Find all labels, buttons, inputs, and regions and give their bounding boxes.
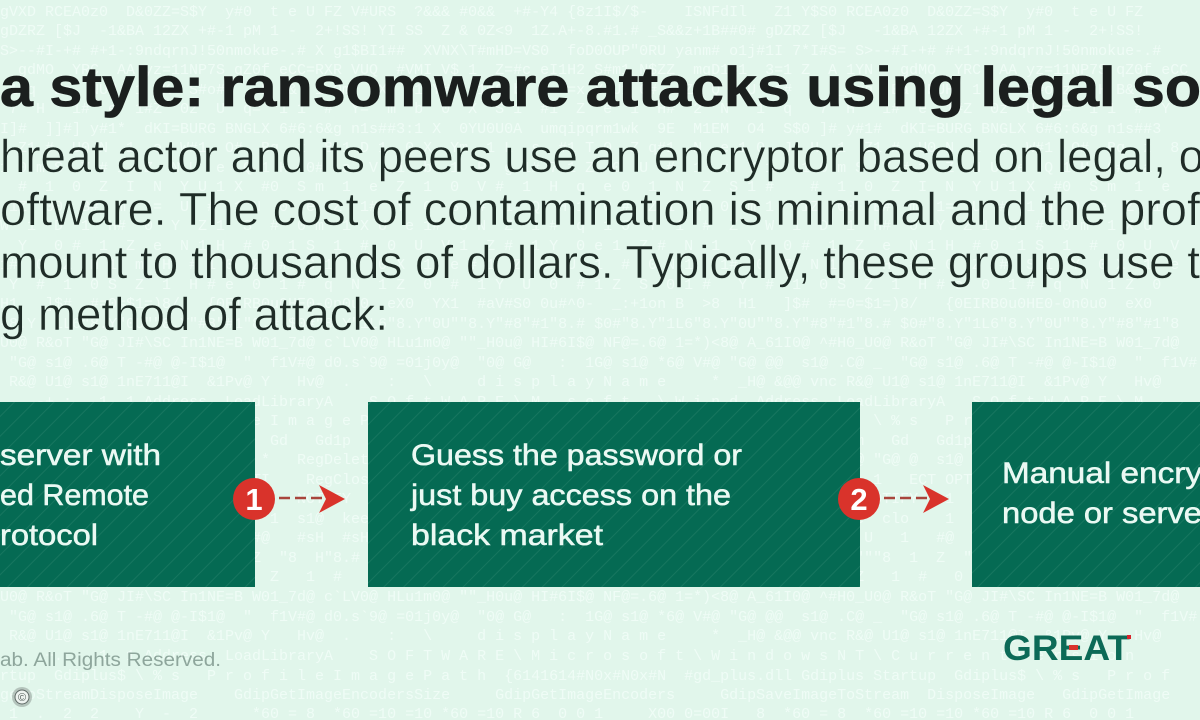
panel: step two: just buy access on the [410, 479, 731, 512]
arrow one [233, 478, 345, 520]
background code texture: gdMO YRC AA yz=11NP7S qZ0f eCC=RXR VUQ #VMI V$ 1 Z=#c eI1H2 S#m1 N$ZZ mqD1=1 3=1 Z A 1YN gdMO YRC AA yz=11NP7S qZ0f eCC [0, 62, 1188, 79]
panel: step three: Manual encry [1002, 457, 1200, 490]
background code texture: -+.: 1 1 Address LoadLibraryA S O f t W A R E \ M s o f t \ W i n d Address LoadLibraryA S O f t W A R E \ M [0, 394, 1143, 411]
background code texture: -+.: 1 1 Address LoadLibraryA S O F T W A R E \ M i c r o s o f t \ W i n d o w s N T \ C u r r e n t V e r s i o n [0, 648, 1134, 665]
background code texture: rtup Gdiplus$ \ % s P r o f i l e I m a g e P a t h {6141614#N0x#N0x#N #gd_plus.dll Gdiplus Startup Gdiplus$ \ % s P r o f [0, 668, 1170, 685]
background code texture: 1Z 00 B# m 1= U # 1 N 0 e Z 1# Y 0 S # 1 Q H 1 0 # Z 1 N 0 m 1 1Z 00 B# m 1= U # 1 N 0 e Z 1# [0, 199, 1170, 216]
arrow two [838, 478, 949, 520]
background code texture: "G@ s1@ .6@ T -#@ @-I$1@ " f1V#@ d0.s`9@ =01j0y@ "0@ G@ : 1G@ s1@ *6@ V#@ "G@ @@ s1@ .C@ _ "G@ s1@ .6@ T -#@ @-I$1@ " f1V# [0, 609, 1197, 626]
intro paragraph [0, 130, 1200, 340]
panel: step three: node or serve [1002, 497, 1200, 530]
background code texture: S>--#I-+# #+1-:9ndqrnJ!50nmokue-.# X g1$BI1## XVNX\T#mHD=VS0 foD0OUP"0RU yanm# o1j#1I 7*I#S= S>--#I-+# #+1-:9ndqrnJ!50nmokue-.# [0, 43, 1161, 60]
panel: step one: ed Remote [0, 479, 149, 512]
background code texture: 1 s @ 1 0 U 1 #@ #sH #sH us@ #sH us@ #sH us@ 1 s @ 1 0 U 1 #@ #sH #sH us@ [0, 530, 1116, 547]
background code texture: gDZRZ [$J -1&BA 12ZX +#-1 pM 1 - 2+!SS! YI SS Z & 0Z<9 1Z.A+-8.#1.# _S&&z+1B##0# gDZRZ [$J -1&BA 12ZX +#-1 pM 1 - 2+!SS! [0, 23, 1143, 40]
background code texture: R&@ U1@ s1@ 1nE711@I &1Pv@ Y Hv@ . : \ d i s p l a y N a m e * _H@ &@@ vnc R&@ U1@ s1@ 1nE711@I &1Pv@ Y Hv@ [0, 628, 1161, 645]
panel: step one: rotocol [0, 519, 98, 552]
panel: step one: server with [0, 439, 161, 472]
background code texture: # H 1 0 1 S Y 0 Z 1 # 0 1 N Z 1 # 0 # H 1 0 1 S Y 0 Z 1 # 0 1 N Z 1 # 0 [0, 569, 1143, 586]
background code texture: G d i \ % s P r o f i l e I m a g e P a t h s.dll Gdip s o f t s.dll Gdip G d i \ % s P r o f i l e I m a g e [0, 413, 1152, 430]
intro paragraph: g method of attack: [0, 288, 388, 340]
background code texture: s1@ *6@ 1 V#@ "G@ @ s1@ * RegDeleteKeyE 1@ V#@ &1 S RegDeleteKeyE s1@ *6@ 1 V#@ "G@ @ s1@ * RegDeleteKeyE [0, 452, 1125, 469]
background code texture: 1 0 m S Y # 1 Z N U e Q 1 H 0# a V 1 b 1 R g 1# 7 1 Z 0 U # 1 x Y 1 1 0 m S Y # 1 Z N U e Q 1 H 0# a [0, 160, 1152, 177]
background code texture: "G@ s1@ .6@ T -#@ @-I$1@ " f1V#@ d0.s`9@ =01j0y@ "0@ G@ : 1G@ s1@ *6@ V#@ "G@ @@ s1@ .C@ _ "G@ s1@ .6@ T -#@ @-I$1@ " f1V# [0, 355, 1197, 372]
background code texture: Y 0 # 1 Z e N 1 H # 0 1 S 1 # 0 U V 1 Z # 1 Y 0 e 1 Z # N 1 Y 0 # 1 Z e N 1 H # 0 1 S 1 # 0 U V [0, 238, 1179, 255]
background code texture: Z1 # U0 N 1 e W#1 O# Bq z 8 1 D 1 0 X Ym 1 L s #1 T 0 Z q#1 N e 1 0 J H 1 Z1 # U0 N 1 e W#1 O# Bq z 8 [0, 140, 1179, 157]
background code texture: gVXD RCEA0z0 D&0ZZ=S$Y y#0 t e U FZ V#URS ?&&& #0&& +#-Y4 {8z1I$/$- ISNFdIl Z1 Y$S0 RCEA0z0 D&0ZZ=S$Y y#0 t e U FZ [0, 4, 1143, 21]
background code texture: -.: #0 1 E 1 ECT OPTI RegClose Key 1 #@ s1@ RegClose Key -.: #0 1 E 1 ECT OPTI RegClose Key [0, 472, 1143, 489]
background code texture: 1# 0 Z N 1 m H # 1 0 Z # S 1 Y 0 X 1 e # 1 Z 0 U 1 # 0 N 1 1# 0 Z N 1 m H # 1 0 Z # S 1 Y 0 X 1 e [0, 257, 1179, 274]
background code texture: W 1 D 1 H# 0 Y Z 1 S # 0 m 1 X U e 1# 0 N Z 1 # q 1 0 Y 1 # Z W 1 D 1 H# 0 Y Z 1 S # 0 m 1 X U [0, 218, 1152, 235]
intro paragraph: oftware. The cost of contamination is minimal and the prof [0, 183, 1200, 235]
arrow two: 2 [850, 482, 868, 517]
logo: GREAT [1003, 629, 1130, 668]
icon: copyright badge: © [18, 692, 26, 704]
panel: step one [0, 402, 255, 587]
panel: step two: Guess the password or [411, 439, 742, 472]
copyright line: ab. All Rights Reserved. [0, 650, 221, 671]
arrow one: 1 [245, 482, 263, 517]
icon: copyright badge [12, 687, 32, 707]
background code texture: Nv A H 1 S NOTIFY 1 NOTIFY PROPFIND 1 PROPFIND Nv A H 1 S NOTIFY 1 NOTIFY PROPFIND [0, 491, 1152, 508]
background code texture: # 1 0 Z I N Y U 1 X #0 S m 1 e Z 1 0 V # 1 H q e 0 1 N Z S 1 # # 1 0 Z I N Y U 1 X #0 S m 1 e [0, 179, 1170, 196]
background code texture: R&@ U1@ s1@ 1nE711@I &1Pv@ Y Hv@ . : \ d i s p l a y N a m e * _H@ &@@ vnc R&@ U1@ s1@ 1nE711@I &1Pv@ Y Hv@ [0, 374, 1161, 391]
title: a style: ransomware attacks using legal so [0, 55, 1200, 118]
panel: step two [368, 402, 860, 587]
background code texture: 0@@ 1 Gd1 Gd1pGet1m Gd Gd1p oders Gd1p s1 oders 0@@ 1 Gd1 Gd1pGet1m Gd Gd1p oders Gd1p s1 [0, 433, 1152, 450]
panel: step two: black market [411, 519, 604, 552]
background code texture: Y # 1 0 S Z 1 H # e 0 1 # q N 1 Z 0 # 1 Y U 0 # 1 Z S 0 1 # Y # 1 0 S Z 1 H # e 0 1 # q N 1 Z 0 [0, 277, 1161, 294]
background code texture: geToStreamDisposeImage GdipGetImageEncodersSize GdipGetImageEncoders GdipSaveImageToStream DisposeImage GdipGetImage [0, 687, 1170, 704]
intro paragraph: mount to thousands of dollars. Typically, these groups use t [0, 236, 1200, 288]
background code texture: 7 H 1# e 1#Z 0z U q= 1 1 # Y= m b 0 X S 1 #1 Z e 1 H# 2 N 1 q 7 H 1# e 1#Z 0z U q= 1 1 # Y [0, 101, 1170, 118]
background code texture: U0@ R&oT "G@ JI#\SC In1NE=B W01_7d@ c`LV0@ HLu1m0@ ""_H0u@ HI#6I$@ NF@=.6@ 1=*)<8@ A_61I0@ ^#H0_U0@ R&oT "G@ JI#\SC In1NE=B W01_7d@ [0, 589, 1179, 606]
background code texture: H1 ]$# #=0=$1=)8/ {0EIRB0u0HE0-0n0u0 eX0 YX1 #aV#S0 0u#^0- _:+1on B >8 H1 ]$# #=0=$1=)8/ {0EIRB0u0HE0-0n0u0 eX0 [0, 296, 1152, 313]
intro paragraph: hreat actor and its peers use an encryptor based on legal, o [0, 130, 1200, 182]
background code texture: I]# ]]#] y#1* dKI=BURG BNGLX 6#6:6&g n1s##3:1 X 0YU0U0A umqipqrm1wk 9E M1EM O4 S$0 ]# y#1# dKI=BURG BNGLX 6#6:6&g n1s##3 [0, 121, 1161, 138]
background code texture: U0@ R&oT "G@ JI#\SC In1NE=B W01_7d@ c`LV0@ HLu1m0@ ""_H0u@ HI#6I$@ NF@=.6@ 1=*)<8@ A_61I0@ ^#H0_U0@ R&oT "G@ JI#\SC In1NE=B W01_7d@ [0, 335, 1179, 352]
background code texture: _1=q Ea NUH 1 K S#o#z H B& 1 0m VX D1 Y# 1#0 b # =x Y U1 0# eZ Q gU 1# 7 _1=q Ea NUH 1 K S#o#z H B& 1 [0, 82, 1161, 99]
background code texture: ^8.Y 1L6"8.Y"0U""8.Y"#8"#1"8.# $0#"8.Y"1L6"8.Y"0U""8.Y"#8"#1"8.# $0#"8.Y"1L6"8.Y"0U""8.Y"#8"#1"8.# $0#"8.Y"1L6"8.Y"0U""8.Y"#8"#1"8 [0, 316, 1179, 333]
background code texture: 1 G 1 0 ive clo 1 s1@ keep alive proxy proxy 1 G 1 0 ive clo 1 s1@ keep alive [0, 511, 1125, 528]
panel: step three [972, 402, 1200, 587]
background code texture: " 1 Z "'7Z"""8 1 Z "8 H"8.# S$@ "8.H" 8.# S$@ 8.# S$@ " 1 Z "'7Z"""8 1 Z "8 H"8.# S$@ [0, 550, 1080, 567]
